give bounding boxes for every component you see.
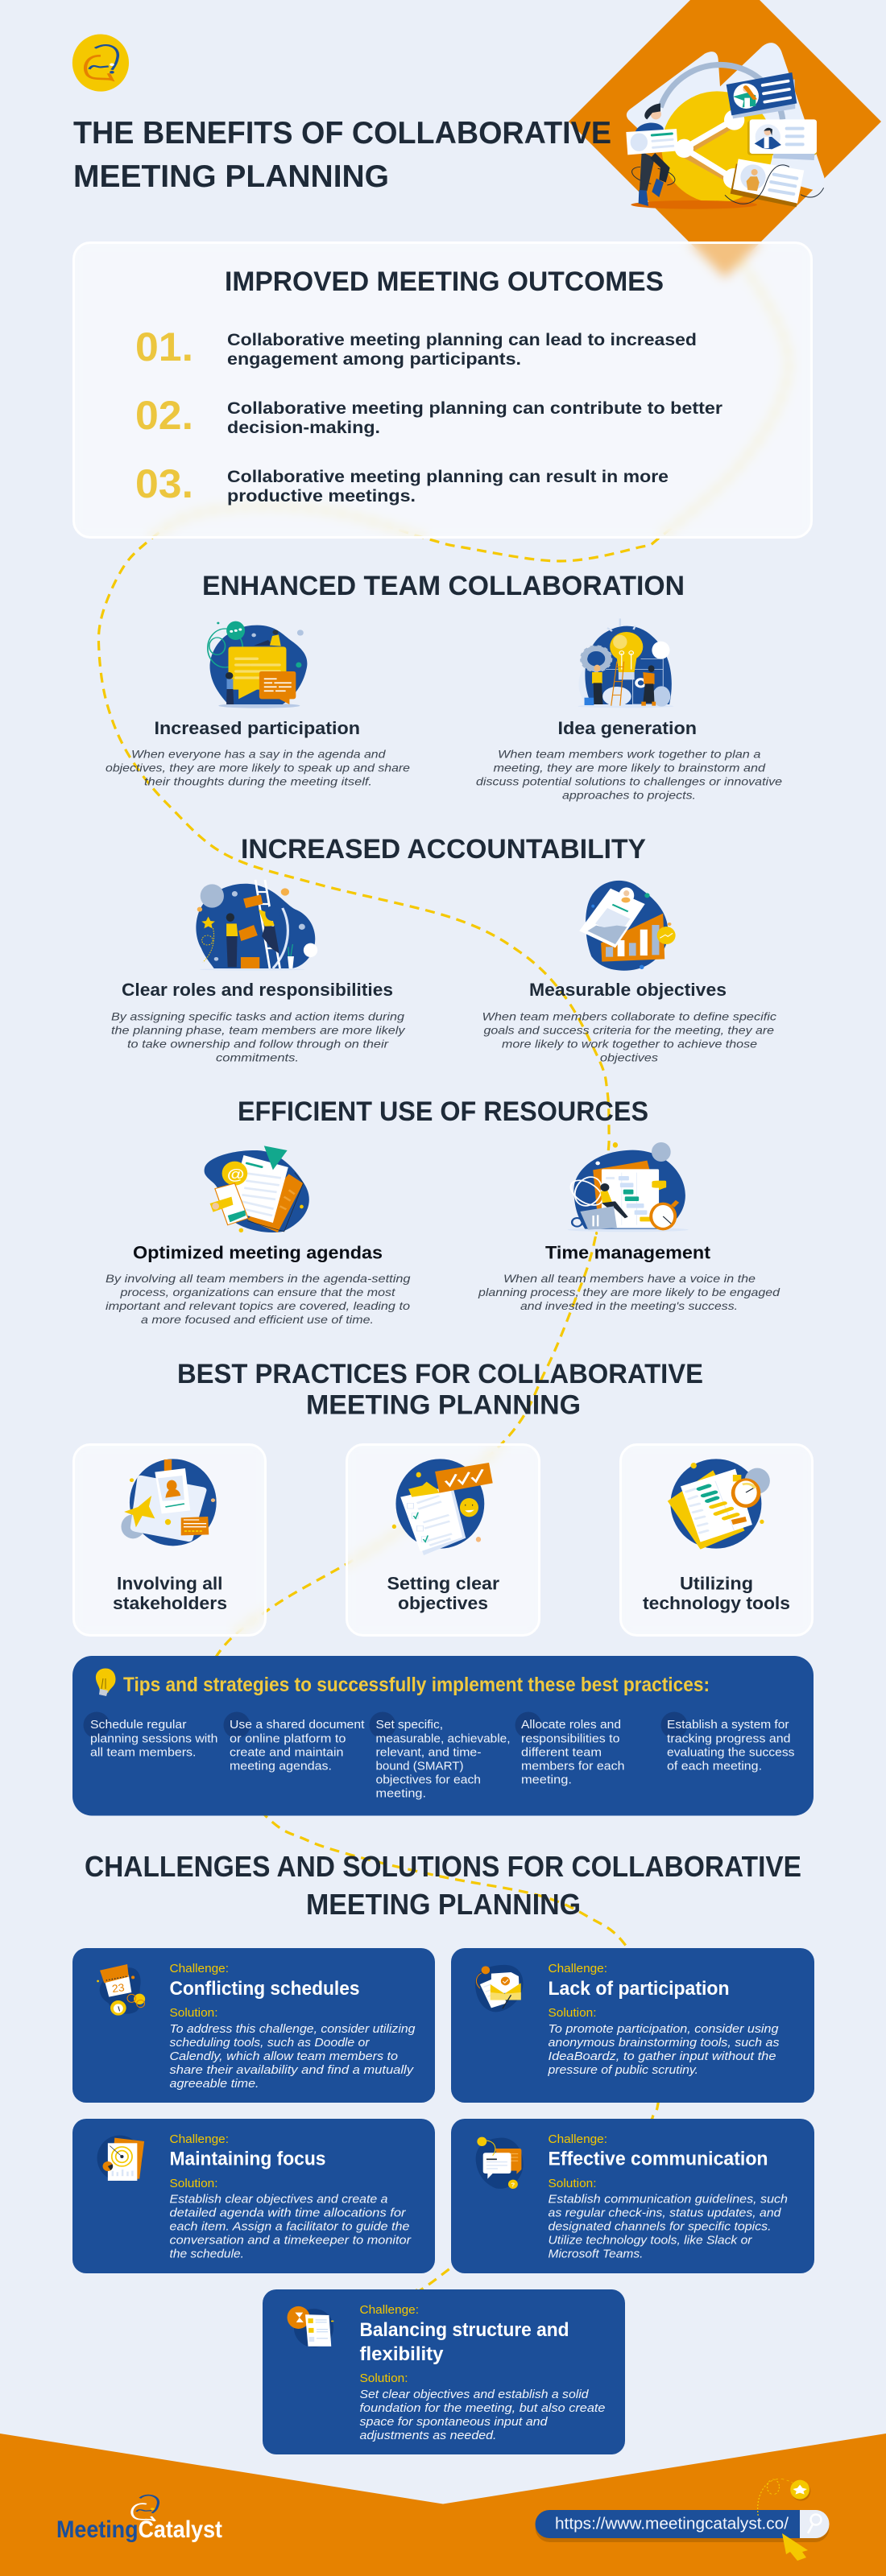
logo text: MeetingCatalyst [56,2516,222,2543]
tip 3: relevant, and time- [375,1745,482,1760]
label: involving all stakeholders: Involving all [117,1573,222,1594]
text block: time management: and invested in the meeting's success. [520,1299,738,1312]
tip 4: members for each [521,1760,625,1773]
icon: target [97,2136,144,2181]
text block: clear roles and responsibilities: By assigning specific tasks and action items during [111,1009,404,1022]
tip 5: Establish a system for [667,1718,789,1732]
text block: time management: planning process, they are more likely to be engaged [478,1286,780,1298]
section: improved meeting outcomes content [135,266,722,506]
tip 2: or online platform to [230,1732,346,1745]
solution text: Establish communication guidelines, such [548,2193,788,2206]
solution text [548,2193,788,2260]
icon: schedule tool and stopwatch [668,1459,770,1550]
solution text: Set clear objectives and establish a solid [359,2388,590,2401]
text block: time management [478,1243,780,1312]
solution text: foundation for the meeting, but also create [359,2402,606,2415]
icon: id badge and star [121,1459,217,1546]
solution text: To address this challenge, consider utilizing [169,2023,416,2036]
text block: time management: When all team members have a voice in the [503,1272,756,1285]
panel: involving all stakeholders [72,1443,267,1637]
challenge label: Challenge: [359,2303,419,2317]
header orange diamond [569,0,881,278]
text block: idea generation [476,718,782,802]
tip 2 [230,1718,365,1773]
solution text: Establish clear objectives and create a [169,2193,388,2206]
solution text: the schedule. [169,2248,244,2260]
text block: measurable objectives: When team members collaborate to define specific [482,1009,776,1022]
text block: time management: Time management [545,1243,711,1262]
text block: idea generation: discuss potential solutions to challenges or innovative [476,774,782,787]
url text: https://www.meetingcatalyst.co/ [555,2515,789,2533]
solution text [169,2193,412,2260]
challenge title: Balancing structure and [359,2319,569,2341]
icon: light bulb idea [578,618,673,708]
tip 4 [521,1718,625,1787]
title: MEETING PLANNING [73,159,389,194]
tip 3 [375,1718,511,1800]
item 03: 03. [135,461,193,506]
solution text: Utilize technology tools, like Slack or [548,2235,753,2248]
text block: increased participation [106,718,410,787]
icon: building blocks and ladder [196,880,317,971]
challenge label: Challenge: [548,1962,607,1975]
solution text: designated channels for specific topics. [548,2220,772,2233]
tip 1: all team members. [90,1745,197,1760]
heading: efficient use of resources: EFFICIENT USE OF RESOURCES [238,1096,648,1127]
item 02: Collaborative meeting planning can contribute to better [227,399,722,418]
heading: IMPROVED MEETING OUTCOMES [225,266,664,297]
challenge title: flexibility [359,2343,444,2365]
label: utilizing technology tools: Utilizing [680,1573,753,1594]
solution text: detailed agenda with time allocations for [169,2207,407,2220]
tip 1: Schedule regular [90,1718,187,1732]
item 02: decision-making. [227,419,380,437]
solution text: Calendly, which allow team members to [169,2050,398,2063]
tip 4: different team [521,1745,602,1760]
text block: measurable objectives [482,980,776,1064]
tip 2: create and maintain [230,1745,343,1760]
tip 3: bound (SMART) [375,1760,464,1773]
footer orange band [0,2434,886,2576]
tip bullets [84,1711,688,1739]
panel: tips and strategies [72,1656,814,1816]
icon: speech bubbles [208,621,307,708]
footer logo: meeting catalyst [56,2496,222,2543]
challenge title [359,2319,569,2365]
icon: measurable chart and report [579,881,676,971]
tip 5 [667,1718,794,1773]
solution text: space for spontaneous input and [359,2416,549,2429]
challenge label: Challenge: [169,2132,229,2146]
challenge title: Maintaining focus [169,2148,325,2170]
tip 5: tracking progress and [667,1732,791,1745]
panel: effective communication [451,2119,814,2273]
tips heading: Tips and strategies to successfully implement these best practices: [123,1674,710,1696]
text block: increased participation: When everyone has a say in the agenda and [131,747,387,760]
solution text [169,2023,416,2091]
solution text: share their availability and find a mutually [169,2064,414,2077]
tip 4: responsibilities to [521,1732,620,1745]
icon: logo mark [132,2496,159,2521]
icon: light bulb [96,1668,116,1696]
illustration: team network on diamond [626,43,824,209]
tip 5: of each meeting. [667,1760,762,1773]
text block: clear roles and responsibilities: Clear roles and responsibilities [122,980,393,1000]
challenge label: Challenge: [548,2132,607,2146]
text block: optimized meeting agendas: Optimized meeting agendas [133,1243,383,1262]
solution label: Solution: [169,2177,217,2190]
solution text: scheduling tools, such as Doodle or [169,2037,371,2050]
solution text [547,2023,780,2077]
item 01: 01. [135,324,193,369]
solution text: IdeaBoardz, to gather input without the [548,2050,776,2063]
tip 1: planning sessions with [90,1732,217,1745]
panel: improved meeting outcomes [72,242,813,539]
tip 3: objectives for each [375,1773,481,1787]
solution text: To promote participation, consider using [548,2023,778,2036]
text block: measurable objectives: goals and success criteria for the meeting, they are [483,1024,774,1037]
icon: meeting catalyst logo badge [72,35,129,92]
text block: idea generation: When team members work together to plan a [498,747,761,760]
item 01: engagement among participants. [227,350,521,369]
solution text: anonymous brainstorming tools, such as [548,2037,780,2050]
solution text: agreeable time. [169,2078,259,2091]
label: setting clear objectives [387,1573,499,1613]
challenge title: Conflicting schedules [169,1978,359,2000]
tip 2: Use a shared document [230,1718,365,1732]
icon: checklist clipboard [392,1459,493,1555]
text block: optimized meeting agendas: a more focused and efficient use of time. [141,1313,374,1326]
icon: chat bubbles [476,2137,524,2189]
text block: increased participation: their thoughts during the meeting itself. [144,774,372,787]
text block: measurable objectives: objectives [600,1051,658,1064]
panel: lack of participation [451,1948,814,2103]
heading: challenges and solutions: CHALLENGES AND SOLUTIONS FOR COLLABORATIVE [85,1850,801,1883]
heading: best practices: MEETING PLANNING [306,1389,581,1420]
heading: enhanced team collaboration: ENHANCED TEAM COLLABORATION [202,571,685,601]
heading: increased accountability: INCREASED ACCOUNTABILITY [241,834,646,865]
icon: star badge and dashed trail [758,2479,810,2516]
label: involving all stakeholders [113,1573,227,1613]
icon: chat bubbles: ? [511,2181,515,2188]
text block: idea generation: meeting, they are more likely to brainstorm and [493,762,766,774]
text block: measurable objectives: more likely to work together to achieve those [502,1037,757,1050]
label: involving all stakeholders: stakeholders [113,1593,227,1613]
text block: optimized meeting agendas: By involving all team members in the agenda-setting [106,1272,411,1285]
panel: maintaining focus [72,2119,435,2273]
item 02: 02. [135,393,193,438]
item 01: Collaborative meeting planning can lead to increased [227,331,697,349]
item 02 [135,393,722,438]
tip 3: measurable, achievable, [375,1732,511,1745]
text block: increased participation: objectives, they are more likely to speak up and share [106,762,410,774]
text block: optimized meeting agendas [106,1243,411,1326]
label: setting clear objectives: objectives [398,1593,488,1613]
panel: utilizing technology tools [619,1443,814,1637]
solution label: Solution: [548,2177,596,2190]
icon: hourglass checklist [288,2306,333,2347]
challenge label: Challenge: [169,1962,229,1975]
heading: challenges and solutions [85,1850,801,1921]
text block: clear roles and responsibilities: the planning phase, team members are more likely [111,1024,406,1037]
title [73,116,611,194]
challenge title: Effective communication [548,2148,768,2170]
item 01 [135,324,697,369]
tip 1 [90,1718,217,1760]
icon: calendar and watch [97,1964,145,2016]
icon: pointer cursor [782,2533,808,2561]
solution label: Solution: [359,2372,408,2385]
solution label: Solution: [169,2006,217,2020]
text block: clear roles and responsibilities: to take ownership and follow through on their [127,1037,390,1050]
icon: envelope [475,1965,524,2012]
text block: optimized meeting agendas: important and relevant topics are covered, leading to [106,1299,410,1312]
text block: optimized meeting agendas: process, organizations can ensure that the most [119,1286,396,1298]
panel: balancing structure and flexibility [263,2289,625,2454]
icon: agenda documents [205,1146,309,1232]
panel: setting clear objectives [346,1443,540,1637]
item 03 [135,461,669,506]
tip 2: meeting agendas. [230,1760,332,1773]
icon: agenda documents: @ [227,1166,245,1183]
solution text: Microsoft Teams. [548,2248,643,2260]
icon: magnifier [808,2515,822,2533]
heading: challenges and solutions: MEETING PLANNING [306,1888,581,1921]
solution label: Solution: [548,2006,596,2020]
label: utilizing technology tools: technology tools [643,1593,790,1613]
heading: best practices: BEST PRACTICES FOR COLLABORATIVE [177,1359,703,1389]
text block: clear roles and responsibilities: commitments. [216,1051,299,1064]
heading: best practices [177,1359,703,1420]
solution text [359,2388,606,2442]
tip 3: meeting. [375,1787,426,1800]
tip 4: meeting. [521,1773,572,1787]
label: utilizing technology tools [643,1573,790,1613]
text block: clear roles and responsibilities [111,980,406,1064]
text block: idea generation: approaches to projects. [562,789,696,802]
label: setting clear objectives: Setting clear [387,1573,499,1594]
panel: conflicting schedules [72,1948,435,2103]
item 03: Collaborative meeting planning can result in more [227,468,669,486]
solution text: each item. Assign a facilitator to guide the [169,2220,409,2233]
title: THE BENEFITS OF COLLABORATIVE [73,116,611,151]
tip 4: Allocate roles and [521,1718,621,1732]
solution text: conversation and a timekeeper to monitor [169,2235,412,2248]
text block: measurable objectives: Measurable objectives [529,980,727,1000]
solution text: adjustments as needed. [359,2429,496,2442]
tip 5: evaluating the success [667,1745,794,1760]
icon: time management schedule [565,1142,689,1235]
text block: idea generation: Idea generation [557,718,697,738]
item 03: productive meetings. [227,487,416,506]
footer url search bar [535,2479,830,2561]
challenge title: Lack of participation [548,1978,730,2000]
dashed yellow route line [98,262,789,2292]
solution text: as regular check-ins, status updates, and [548,2207,782,2220]
text block: increased participation: Increased participation [155,718,360,738]
tip 3: Set specific, [375,1718,443,1732]
solution text: pressure of public scrutiny. [547,2064,698,2077]
icon: calendar and watch: 23 [111,1981,126,1995]
